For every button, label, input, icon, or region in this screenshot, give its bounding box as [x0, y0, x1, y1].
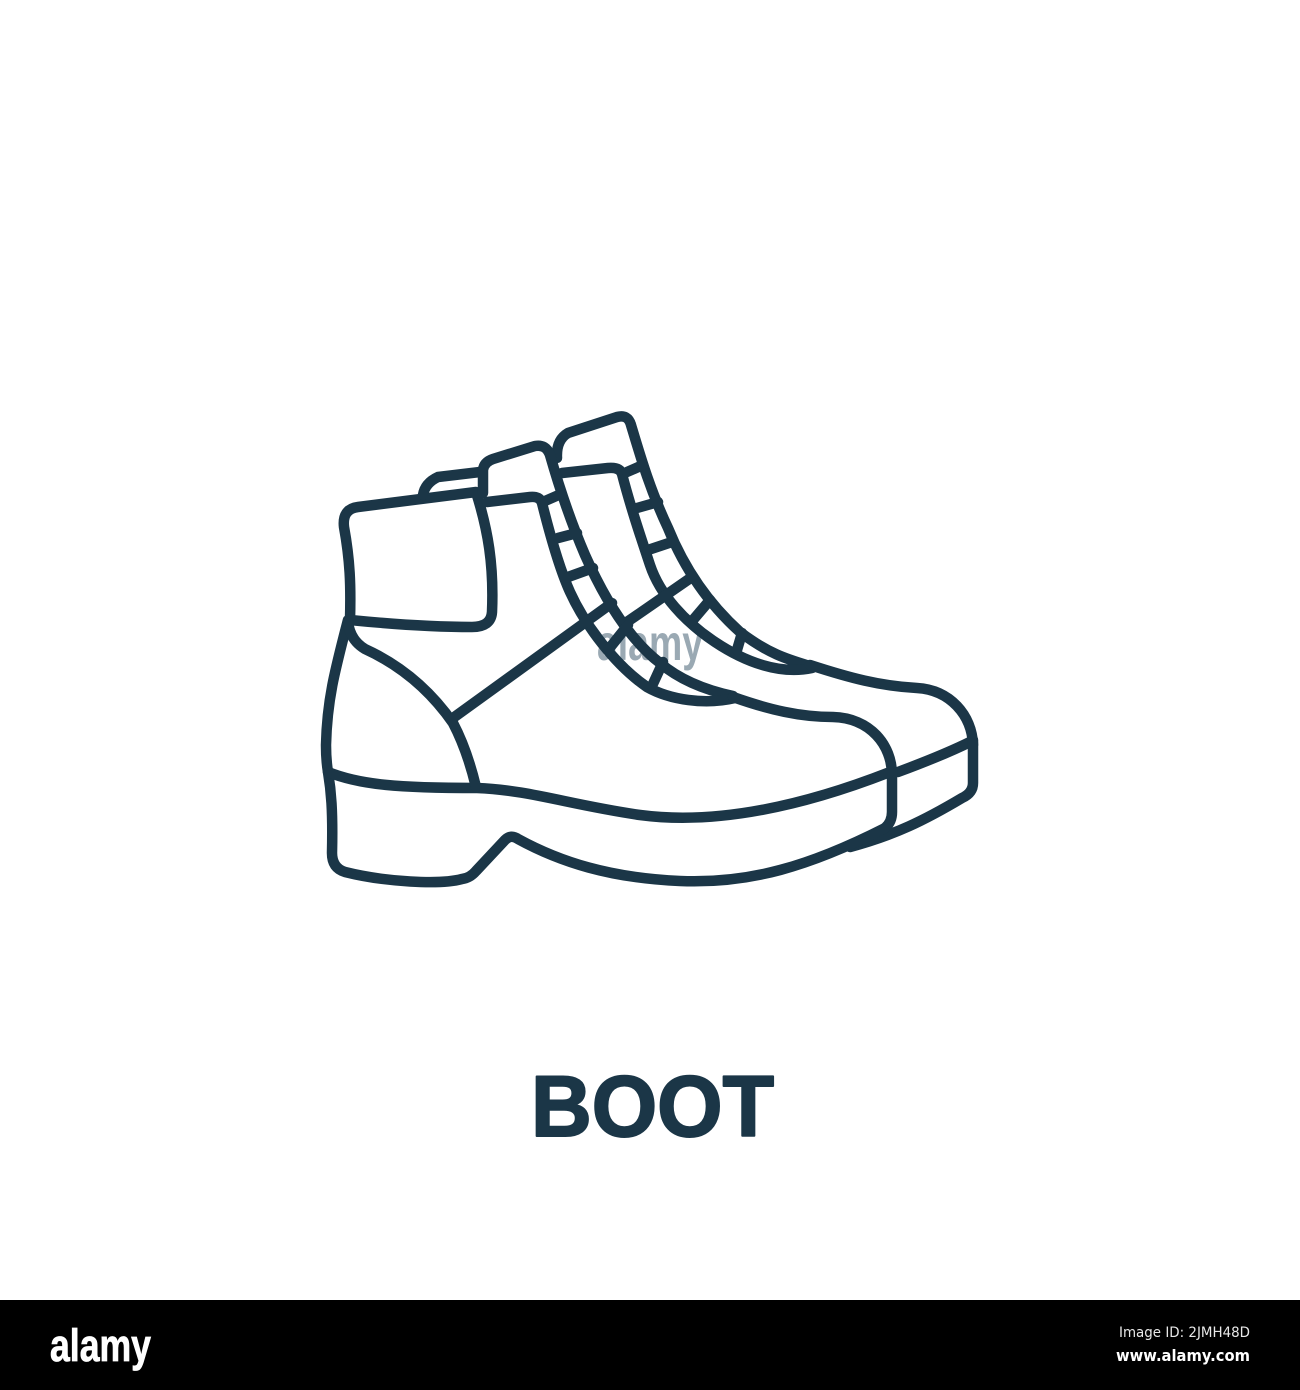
footer bar — [0, 1300, 1300, 1390]
icon: pair of boots — [326, 416, 973, 882]
left boot — [326, 446, 892, 882]
title: BOOT — [531, 1059, 774, 1155]
right boot — [557, 416, 973, 847]
image id: Image ID: 2JMH48D — [1119, 1325, 1250, 1341]
watermark: alamy — [597, 615, 703, 671]
footer logo: alamy — [50, 1320, 151, 1371]
website: www.alamy.com — [1116, 1346, 1250, 1365]
